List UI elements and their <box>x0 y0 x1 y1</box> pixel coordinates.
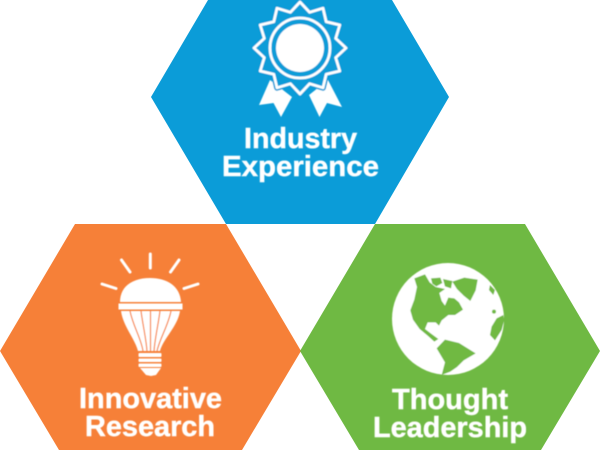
label: Thought Leadership <box>373 384 527 444</box>
label: Innovative Research: Innovative <box>79 383 222 415</box>
label: Industry Experience: Industry <box>244 123 357 155</box>
label: Thought Leadership: Thought <box>392 384 508 416</box>
orange hexagon <box>0 224 301 450</box>
panel: industry experience <box>151 0 449 224</box>
blue hexagon <box>151 0 449 224</box>
label: Innovative Research <box>79 383 222 443</box>
label: Innovative Research: Research <box>85 411 215 443</box>
icon: light bulb <box>102 254 198 376</box>
icon: globe <box>392 263 504 375</box>
icon: award badge <box>254 2 346 117</box>
panel: innovative research <box>0 224 301 450</box>
green hexagon <box>300 224 600 450</box>
label: Industry Experience: Experience <box>222 151 379 183</box>
panel: thought leadership <box>300 224 600 450</box>
label: Industry Experience <box>222 123 379 183</box>
label: Thought Leadership: Leadership <box>373 412 527 444</box>
